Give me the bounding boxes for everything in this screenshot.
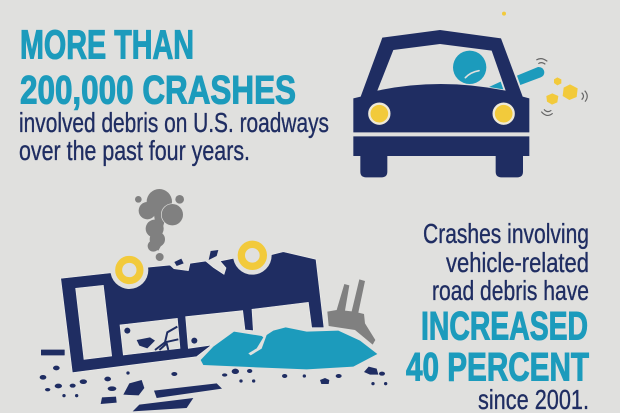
- text block: crash count: [19, 22, 329, 166]
- wheel right: [233, 236, 272, 275]
- headlight right: [494, 104, 514, 124]
- driver arm: [489, 82, 503, 89]
- windshield: [377, 44, 506, 91]
- heading: 200,000 crashes: 200,000 CRASHES: [20, 68, 296, 112]
- body text: involved debris: involved debris on U.S. roadways: [19, 107, 329, 138]
- icon: car with driver throwing debris: [353, 12, 587, 177]
- debris pieces: [502, 12, 578, 105]
- heading: more than: MORE THAN: [20, 22, 194, 68]
- grey engine part: [327, 279, 375, 345]
- car lower bumper and tires: [353, 136, 529, 177]
- road debris: [40, 350, 387, 411]
- driver head: [453, 51, 486, 84]
- motion lines: [536, 59, 587, 115]
- body text: four years: over the past four years.: [19, 135, 250, 166]
- text block: increase statistic: [406, 218, 589, 413]
- smoke cloud: [135, 189, 184, 261]
- teal hood debris: [201, 327, 377, 369]
- overturned car body: [61, 252, 324, 373]
- icon: overturned crashed car: [40, 189, 387, 411]
- wheel left: [110, 251, 148, 289]
- broken window cracks: [124, 327, 197, 350]
- car body: [353, 30, 529, 132]
- body text: vehicle-related: vehicle-related: [446, 247, 589, 278]
- body fragments: [174, 259, 184, 266]
- headlight left: [369, 104, 389, 124]
